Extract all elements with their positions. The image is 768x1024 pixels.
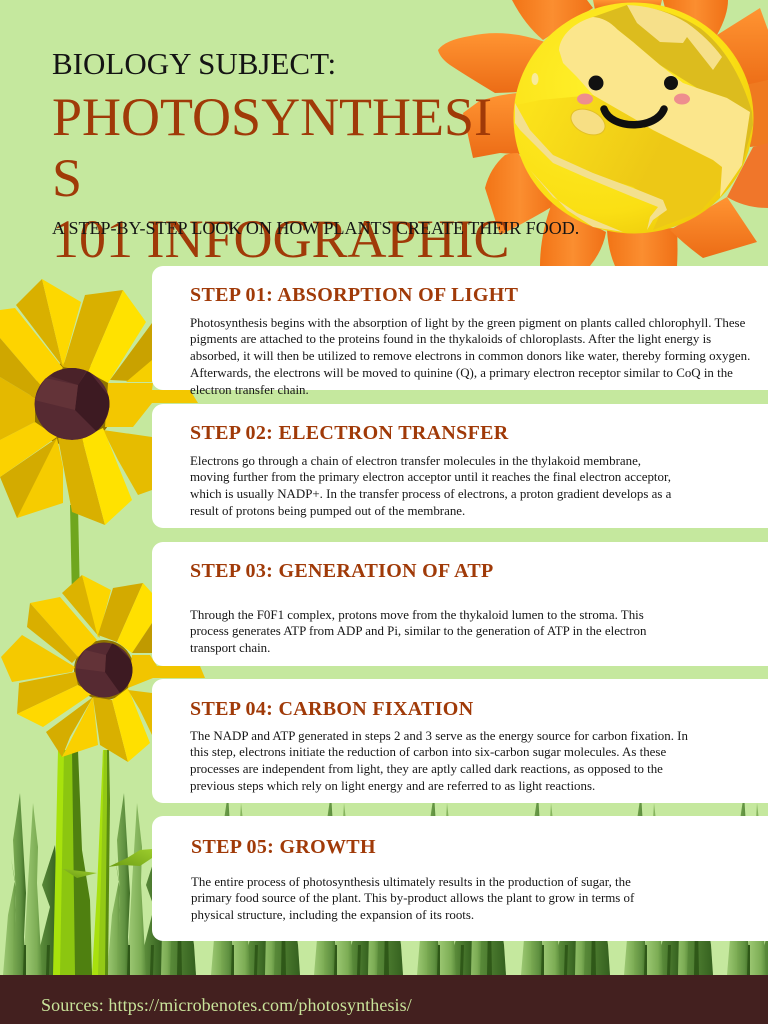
text: step 01: pigments are attached to the proteins found in the thykaloids of chloroplasts. After the light energy is	[190, 331, 711, 346]
text: step 02: Electrons go through a chain of electron transfer molecules in the thylakoid membrane,	[190, 452, 641, 468]
panel: step 01	[152, 266, 768, 390]
sun character	[438, 0, 768, 266]
heading: step 03: STEP 03: GENERATION OF ATP	[190, 560, 494, 582]
sun smile	[604, 109, 664, 125]
top sunflower	[0, 279, 198, 525]
lower sunflower	[1, 575, 205, 762]
heading: step 02: STEP 02: ELECTRON TRANSFER	[190, 422, 509, 444]
text: step 03: Through the F0F1 complex, protons move from the thykaloid lumen to the stroma. This	[190, 606, 644, 622]
panel: step 03	[152, 542, 768, 666]
text: step 04: processes are independent from light, they are aptly called dark reactions, as opposed to the	[190, 761, 663, 776]
plant stems and leaves	[53, 505, 152, 975]
sun ball	[514, 2, 754, 234]
text: step 01: electron transfer chain.	[190, 382, 309, 397]
heading: step 05: STEP 05: GROWTH	[191, 836, 376, 858]
grass clumps along the bottom	[3, 793, 768, 975]
panel: step 05	[152, 816, 768, 941]
text: step 02	[190, 452, 672, 518]
text: step 01: absorbed, it will then be utilized to remove electrons in common donors like water, thereby forming oxygen.	[190, 348, 750, 363]
heading: step 04: STEP 04: CARBON FIXATION	[190, 698, 473, 720]
text: step 03	[190, 606, 646, 655]
footer bar	[0, 975, 768, 1024]
text: step 02: moving further from the primary electron acceptor until it reaches the final electron acceptor,	[190, 469, 671, 484]
sun blush	[577, 94, 690, 104]
sun left highlight spot	[532, 73, 538, 85]
sun eyes	[588, 76, 678, 90]
main title	[52, 87, 510, 269]
heading: step 01: STEP 01: ABSORPTION OF LIGHT	[190, 284, 518, 306]
text: step 03: transport chain.	[190, 640, 270, 655]
text: step 04: The NADP and ATP generated in steps 2 and 3 serve as the energy source for carbon fixation. In	[190, 728, 688, 742]
text: step 01: Photosynthesis begins with the absorption of light by the green pigment on plants called chlorophyll. These	[190, 314, 745, 330]
sun cheek oval	[567, 104, 609, 140]
text: step 05: The entire process of photosynthesis ultimately results in the production of sugar, the	[191, 874, 631, 888]
top sunflower centre	[34, 366, 112, 440]
sources line: Sources: https://microbenotes.com/photosynthesis/	[41, 995, 412, 1015]
sun petals	[438, 0, 768, 266]
text: step 05: physical structure, including the expansion of its roots.	[191, 907, 474, 922]
text: step 03: process generates ATP from ADP and Pi, similar to the generation of ATP in the electron	[190, 623, 646, 638]
subtitle: A STEP-BY-STEP LOOK ON HOW PLANTS CREATE THEIR FOOD.	[52, 218, 579, 238]
text: step 04	[190, 728, 688, 793]
text: step 05: primary food source of the plant. This by-product allows the plant to grow in terms of	[191, 890, 634, 905]
lower sunflower centre	[76, 642, 132, 698]
main title: S	[52, 148, 82, 208]
panel: step 02	[152, 404, 768, 528]
text: step 05	[191, 874, 634, 922]
text: step 04: previous steps which rely on light energy and are referred to as light reactions.	[190, 778, 595, 793]
text: step 01	[190, 314, 750, 397]
text: step 04: this step, electrons initiate the reduction of carbon into six-carbon sugar molecules. As these	[190, 744, 666, 759]
main title: 101 INFOGRAPHIC	[52, 209, 510, 269]
main title: PHOTOSYNTHESI	[52, 87, 492, 147]
text: step 02: which is usually NADP+. In the transfer process of electrons, a proton gradient develops as a	[190, 486, 671, 501]
panel: step 04	[152, 679, 768, 803]
text: step 02: result of protons being pumped out of the membrane.	[190, 503, 465, 518]
text: step 01: Afterwards, the electrons will be moved to quinine (Q), a primary electron receptor similar to CoQ in the	[190, 365, 733, 380]
small title line: BIOLOGY SUBJECT:	[52, 46, 336, 81]
sun surface bands	[593, 5, 753, 165]
